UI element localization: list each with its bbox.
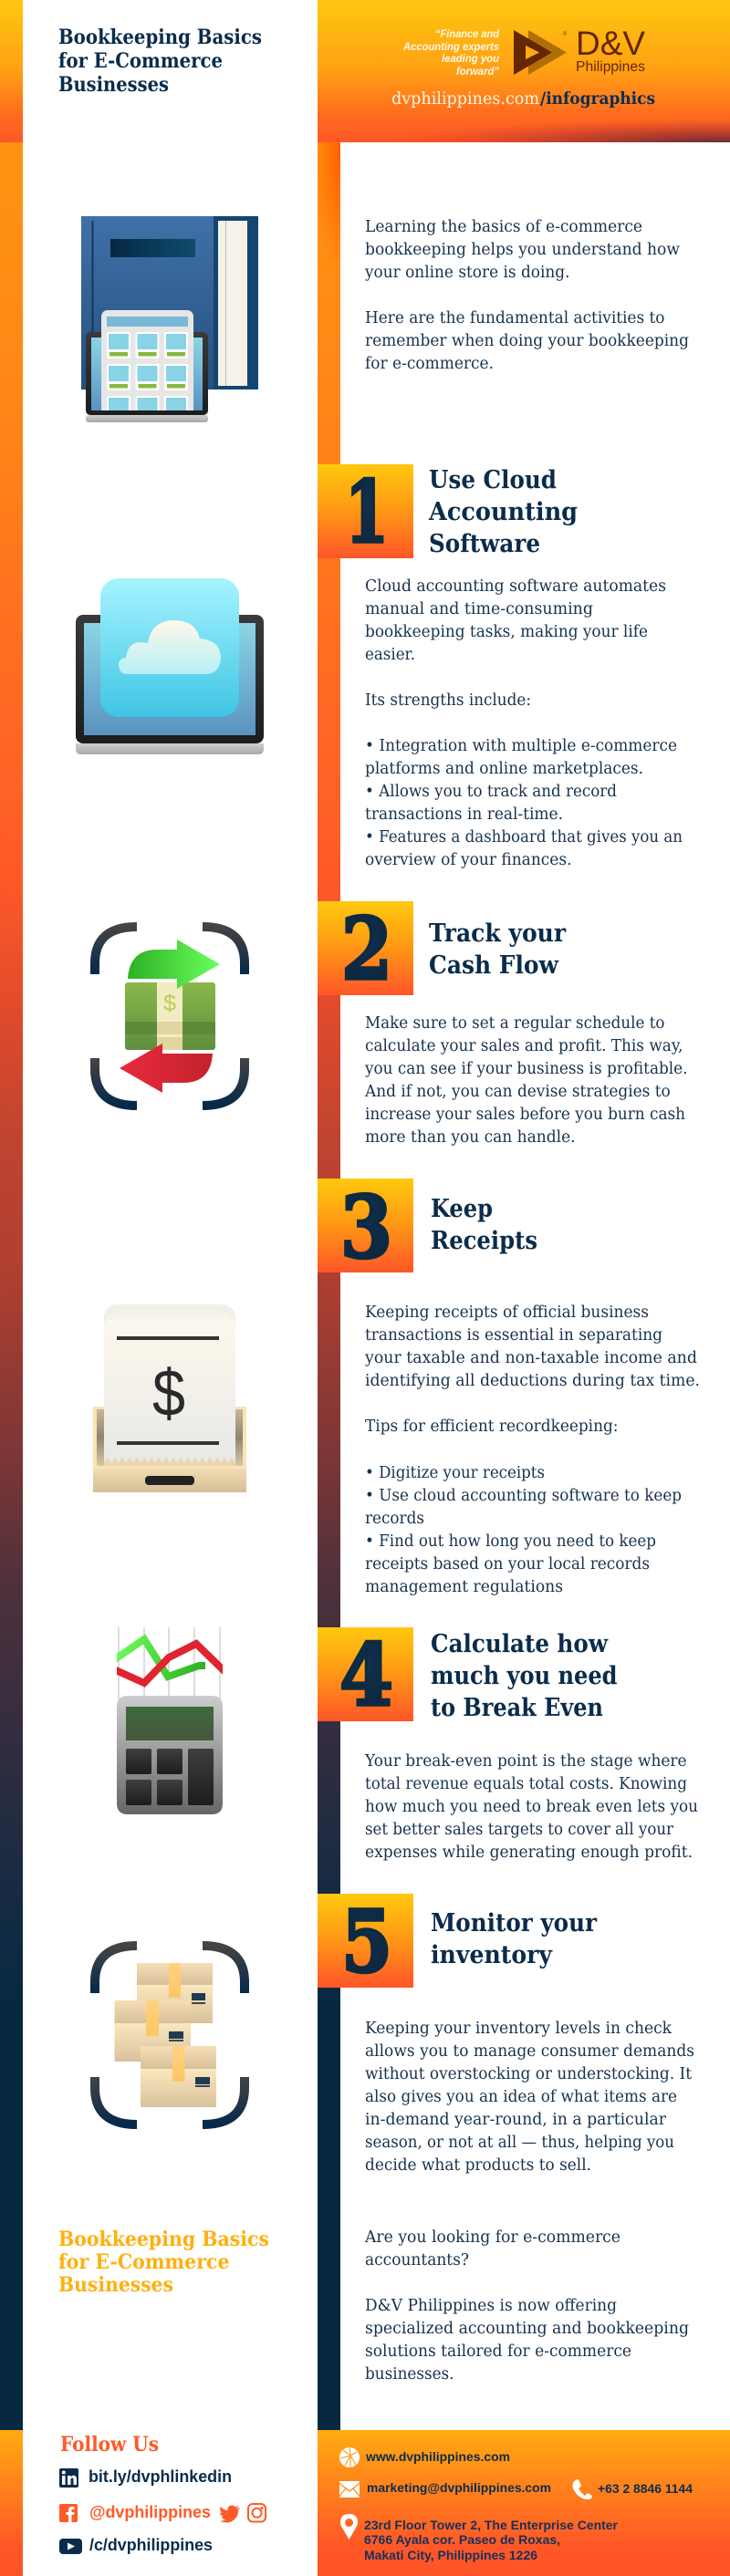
title: [58, 26, 262, 97]
closing call to action: [364, 2228, 689, 2384]
intro text: Here are the fundamental activities to: [365, 309, 664, 327]
tagline: Accounting experts: [402, 42, 499, 53]
section 3 text: Keeping receipts of official business: [365, 1304, 649, 1322]
facebook handle: @dvphilippines: [89, 2503, 211, 2521]
icon: phone: [573, 2479, 592, 2499]
box top: [137, 1963, 213, 2023]
footer: contact panel: [318, 2430, 730, 2576]
number badge 4: 4: [339, 1626, 393, 1726]
footer: social links: [0, 2430, 266, 2576]
section 5 text: also gives you an idea of what items are: [365, 2088, 677, 2106]
icon: twitter: [220, 2506, 240, 2522]
title: for E-Commerce: [58, 49, 223, 73]
icon: receipt in tray: [93, 1304, 246, 1492]
section 4 text: expenses while generating enough profit.: [365, 1844, 693, 1862]
section 2 text: more than you can handle.: [365, 1128, 576, 1147]
heading 1: Use Cloud: [429, 465, 557, 494]
number badge 1: [318, 462, 413, 563]
closing call to action: D&V Philippines is now offering: [365, 2297, 617, 2315]
right gradient stripe: [318, 142, 340, 2430]
section 2 text: you can see if your business is profitable.: [364, 1060, 688, 1078]
icon: globe: [339, 2447, 360, 2467]
icon: ledger book and tablet: [81, 216, 258, 429]
website URL: dvphilippines.com: [391, 89, 539, 109]
email: marketing@dvphilippines.com: [367, 2481, 551, 2495]
icon: location pin: [340, 2514, 358, 2540]
contact background: [318, 2430, 730, 2576]
heading 3: [431, 1194, 537, 1255]
closing title: Bookkeeping Basics: [58, 2228, 269, 2251]
section 4 text: [364, 1752, 698, 1862]
closing call to action: accountants?: [365, 2251, 469, 2270]
section 1 text: overview of your finances.: [365, 851, 571, 869]
section 3 text: • Digitize your receipts: [365, 1464, 545, 1482]
section 3 text: • Find out how long you need to keep: [365, 1532, 656, 1551]
intro text: remember when doing your bookkeeping: [365, 332, 689, 350]
section 1 text: transactions in real-time.: [365, 805, 563, 824]
title: Bookkeeping Basics: [58, 26, 262, 49]
box bottom: [141, 2046, 216, 2107]
scan brackets: [95, 1946, 245, 2124]
tagline: [402, 29, 500, 78]
tagline: forward”: [456, 67, 499, 78]
intro text: for e-commerce.: [365, 355, 494, 373]
section 1 text: easier.: [365, 646, 415, 664]
closing title: for E-Commerce: [58, 2250, 230, 2274]
address: 6766 Ayala cor. Paseo de Roxas,: [364, 2533, 560, 2547]
section 2 text: calculate your sales and profit. This way,: [365, 1037, 683, 1055]
icon: cloud on laptop: [76, 578, 264, 754]
follow us heading: Follow Us: [60, 2433, 159, 2457]
section 2 text: And if not, you can devise strategies to: [364, 1083, 671, 1101]
number badge 5: [318, 1892, 413, 1992]
section 5 text: in-demand year-round, in a particular: [365, 2111, 667, 2129]
section 1 text: platforms and online marketplaces.: [365, 760, 643, 778]
heading 4: to Break Even: [431, 1693, 603, 1722]
icon: mail: [339, 2481, 360, 2498]
heading 3: Receipts: [431, 1226, 537, 1255]
heading 5: Monitor your: [431, 1908, 597, 1937]
closing title: Businesses: [58, 2273, 173, 2297]
intro text: Learning the basics of e-commerce: [365, 218, 642, 236]
section 5 text: decide what products to sell.: [365, 2156, 591, 2175]
green arrow: [128, 940, 220, 989]
website URL: /infographics: [540, 89, 655, 109]
heading 4: much you need: [431, 1661, 617, 1690]
closing call to action: Are you looking for e-commerce: [364, 2228, 620, 2247]
banknotes: $: [163, 991, 176, 1016]
section 3 text: • Use cloud accounting software to keep: [365, 1487, 682, 1505]
icon: receipt in tray: $: [152, 1357, 185, 1430]
number badge 3: 3: [340, 1178, 392, 1278]
section 1 text: Cloud accounting software automates: [365, 577, 666, 596]
section 1 text: bookkeeping tasks, making your life: [365, 623, 648, 641]
section 3 text: your taxable and non-taxable income and: [364, 1349, 697, 1367]
header right band: [318, 0, 730, 142]
section 4 text: how much you need to break even lets you: [365, 1798, 698, 1816]
closing call to action: specialized accounting and bookkeeping: [365, 2320, 689, 2338]
heading 4: Calculate how: [431, 1629, 609, 1658]
tagline: “Finance and: [435, 29, 500, 40]
icon: calculator and line chart: [117, 1627, 223, 1814]
icon: facebook: [59, 2504, 78, 2522]
closing call to action: businesses.: [365, 2365, 454, 2384]
section 5 text: without overstocking or understocking. It: [365, 2065, 692, 2083]
section 4 text: total revenue equals total costs. Knowing: [365, 1775, 687, 1793]
address: Makati City, Philippines 1226: [364, 2549, 538, 2562]
heading 1: [428, 465, 578, 558]
website URL: [391, 89, 655, 109]
number badge 2: 2: [341, 899, 392, 1000]
footer left stripe: [0, 2430, 23, 2576]
icon: cash flow arrows: [95, 927, 245, 1106]
number badge 4: [318, 1626, 413, 1726]
heading 2: Cash Flow: [429, 950, 559, 980]
youtube link: /c/dvphilippines: [89, 2536, 213, 2554]
section 3 text: [364, 1304, 700, 1596]
heading 1: Accounting: [428, 497, 578, 526]
icon: stacked boxes: [95, 1946, 245, 2124]
phone number: +63 2 8846 1144: [598, 2482, 694, 2496]
heading 1: Software: [429, 529, 540, 558]
linkedin link: bit.ly/dvphlinkedin: [89, 2467, 232, 2486]
section 3 text: identifying all deductions during tax time.: [365, 1372, 700, 1390]
section 3 text: management regulations: [365, 1578, 563, 1596]
section 1 text: • Features a dashboard that gives you an: [365, 828, 683, 847]
header panel: [0, 0, 730, 142]
icon: instagram: [248, 2504, 266, 2521]
intro text: [364, 218, 689, 373]
number badge 1: 1: [345, 462, 389, 563]
address: [364, 2519, 619, 2562]
closing call to action: solutions tailored for e-commerce: [365, 2342, 631, 2361]
intro text: your online store is doing.: [364, 264, 569, 282]
header left stripe: [0, 0, 23, 142]
section 3 text: receipts based on your local records: [365, 1555, 650, 1574]
left gradient stripe: [0, 142, 23, 2430]
heading 4: [431, 1629, 617, 1722]
section 5 text: Keeping your inventory levels in check: [365, 2020, 672, 2038]
D&V logo: ®: [563, 31, 568, 37]
section 4 text: set better sales targets to cover all your: [365, 1821, 674, 1839]
title: Businesses: [58, 73, 169, 97]
section 2 text: increase your sales before you burn cash: [365, 1106, 685, 1124]
heading 5: inventory: [431, 1940, 553, 1969]
heading 3: Keep: [431, 1194, 493, 1223]
scan brackets: [95, 927, 245, 1106]
tagline: leading you: [442, 54, 499, 65]
address: 23rd Floor Tower 2, The Enterprise Center: [364, 2519, 619, 2532]
section 3 text: Tips for efficient recordkeeping:: [365, 1418, 619, 1436]
D&V logo: Philippines: [576, 59, 645, 75]
red arrow: [120, 1044, 213, 1093]
heading 2: Track your: [429, 919, 566, 948]
D&V logo: D&V: [576, 25, 645, 62]
section 1 text: Its strengths include:: [365, 691, 531, 710]
intro text: bookkeeping helps you understand how: [365, 241, 680, 259]
section 2 text: [364, 1014, 688, 1147]
section 1 text: • Integration with multiple e-commerce: [365, 737, 677, 755]
number badge 5: 5: [341, 1892, 392, 1992]
icon: linkedin: [59, 2468, 78, 2488]
website: www.dvphilippines.com: [365, 2450, 510, 2464]
section 3 text: transactions is essential in separating: [365, 1326, 662, 1345]
icon: youtube: [59, 2539, 82, 2554]
section 2 text: Make sure to set a regular schedule to: [365, 1014, 664, 1033]
number badge 2: [318, 899, 413, 1000]
box left: [115, 2000, 191, 2062]
heading 2: [429, 919, 566, 980]
section 5 text: allows you to manage consumer demands: [365, 2042, 694, 2061]
section 5 text: [365, 2020, 694, 2175]
section 1 text: manual and time-consuming: [365, 600, 593, 618]
section 4 text: Your break-even point is the stage where: [364, 1752, 686, 1771]
heading 5: [431, 1908, 597, 1969]
section 3 text: records: [365, 1510, 424, 1528]
section 5 text: season, or not at all — thus, helping you: [365, 2134, 674, 2152]
number badge 3: [318, 1178, 413, 1278]
closing title: [58, 2228, 269, 2297]
section 1 text: • Allows you to track and record: [365, 783, 617, 801]
section 1 text: [365, 577, 683, 869]
D&V logo: [514, 25, 645, 75]
banknotes: [125, 982, 215, 1050]
